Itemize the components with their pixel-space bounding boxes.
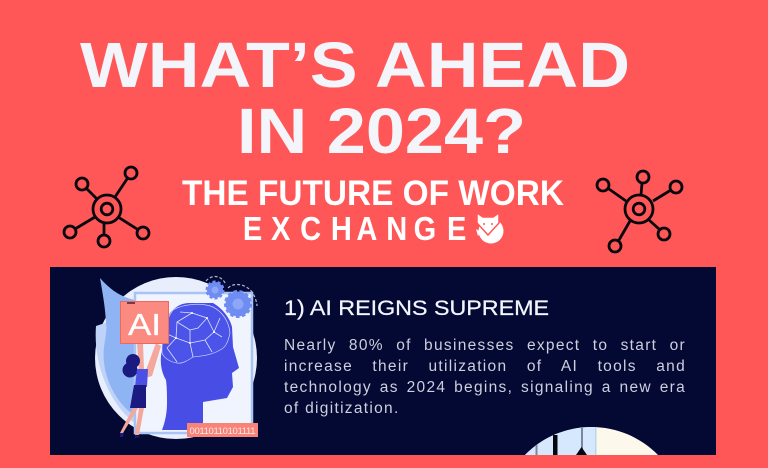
AI sign: AI	[128, 307, 161, 342]
body text: Nearly 80% of businesses expect to start or	[284, 337, 686, 354]
brand: Exchange logo: E	[447, 210, 466, 247]
icon: network left	[64, 167, 149, 247]
illustration: AI head	[95, 276, 258, 439]
AI sign	[120, 302, 168, 344]
body text: technology as 2024 begins, signaling a new era	[284, 379, 686, 396]
brand: Exchange logo: C	[300, 210, 321, 247]
brand: Exchange logo: N	[386, 210, 407, 247]
brand: Exchange logo: A	[356, 210, 377, 247]
subtitle: THE FUTURE OF WORK	[182, 174, 564, 213]
chart: cropped dial	[525, 427, 658, 455]
woman figure	[120, 343, 161, 438]
body text: increase their utilization of AI tools and	[284, 358, 686, 375]
brand: Exchange logo: H	[331, 210, 352, 247]
body text: of digitization.	[284, 400, 400, 417]
gears	[206, 276, 257, 316]
brand: Exchange logo: E	[243, 210, 262, 247]
brand: Exchange logo: G	[414, 210, 436, 247]
title: WHAT’S AHEAD	[80, 29, 630, 101]
heading: 1) AI REIGNS SUPREME	[284, 296, 549, 320]
head silhouette	[161, 303, 239, 430]
title	[80, 29, 630, 167]
brand: Exchange logo	[243, 210, 504, 247]
brand: Exchange logo: X	[271, 210, 291, 247]
panel: AI reigns supreme	[50, 267, 716, 455]
title: IN 2024?	[237, 95, 526, 167]
icon: network right	[597, 171, 682, 252]
icon: fox logo	[476, 213, 504, 244]
body text	[284, 335, 686, 421]
binary tag: 00110110101111	[190, 426, 256, 437]
brain network	[162, 304, 230, 363]
